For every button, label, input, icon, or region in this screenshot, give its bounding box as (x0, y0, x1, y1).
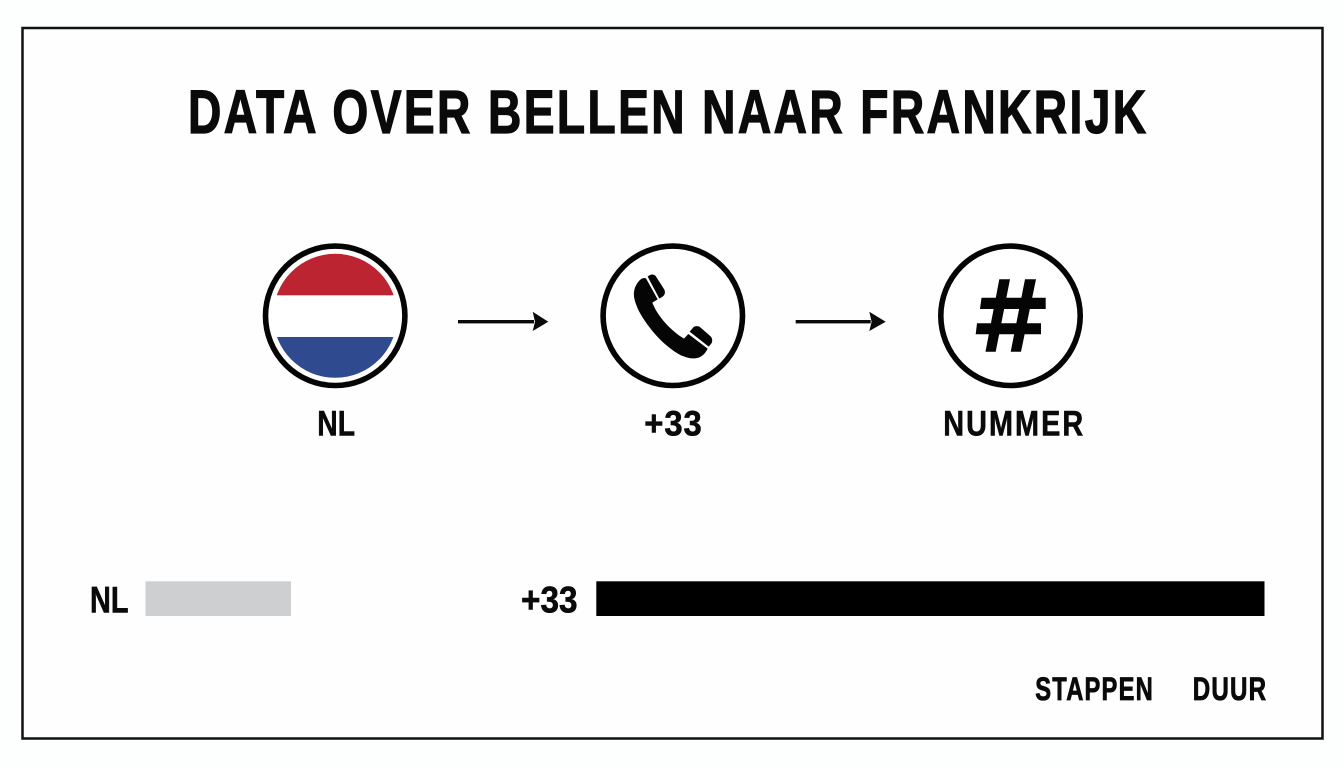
flow diagram (266, 246, 1085, 444)
legend label: duur: DUUR (1193, 671, 1267, 707)
bar: +33 (596, 581, 1264, 616)
label: +33: +33 (644, 404, 703, 444)
legend label: stappen: STAPPEN (1035, 671, 1154, 707)
label: +33 bar: +33 (521, 580, 578, 620)
bar: NL (146, 581, 291, 616)
icon: Dutch flag (266, 246, 405, 386)
arrow: +33 to nummer (796, 312, 886, 331)
label: NUMMER: NUMMER (943, 404, 1085, 444)
bar comparison (90, 580, 1264, 620)
icon: telephone handset (603, 246, 742, 386)
label: NL: NL (317, 404, 355, 444)
arrow: NL to +33 (458, 312, 548, 331)
label: NL bar: NL (90, 580, 128, 620)
icon: hash sign (941, 246, 1080, 386)
